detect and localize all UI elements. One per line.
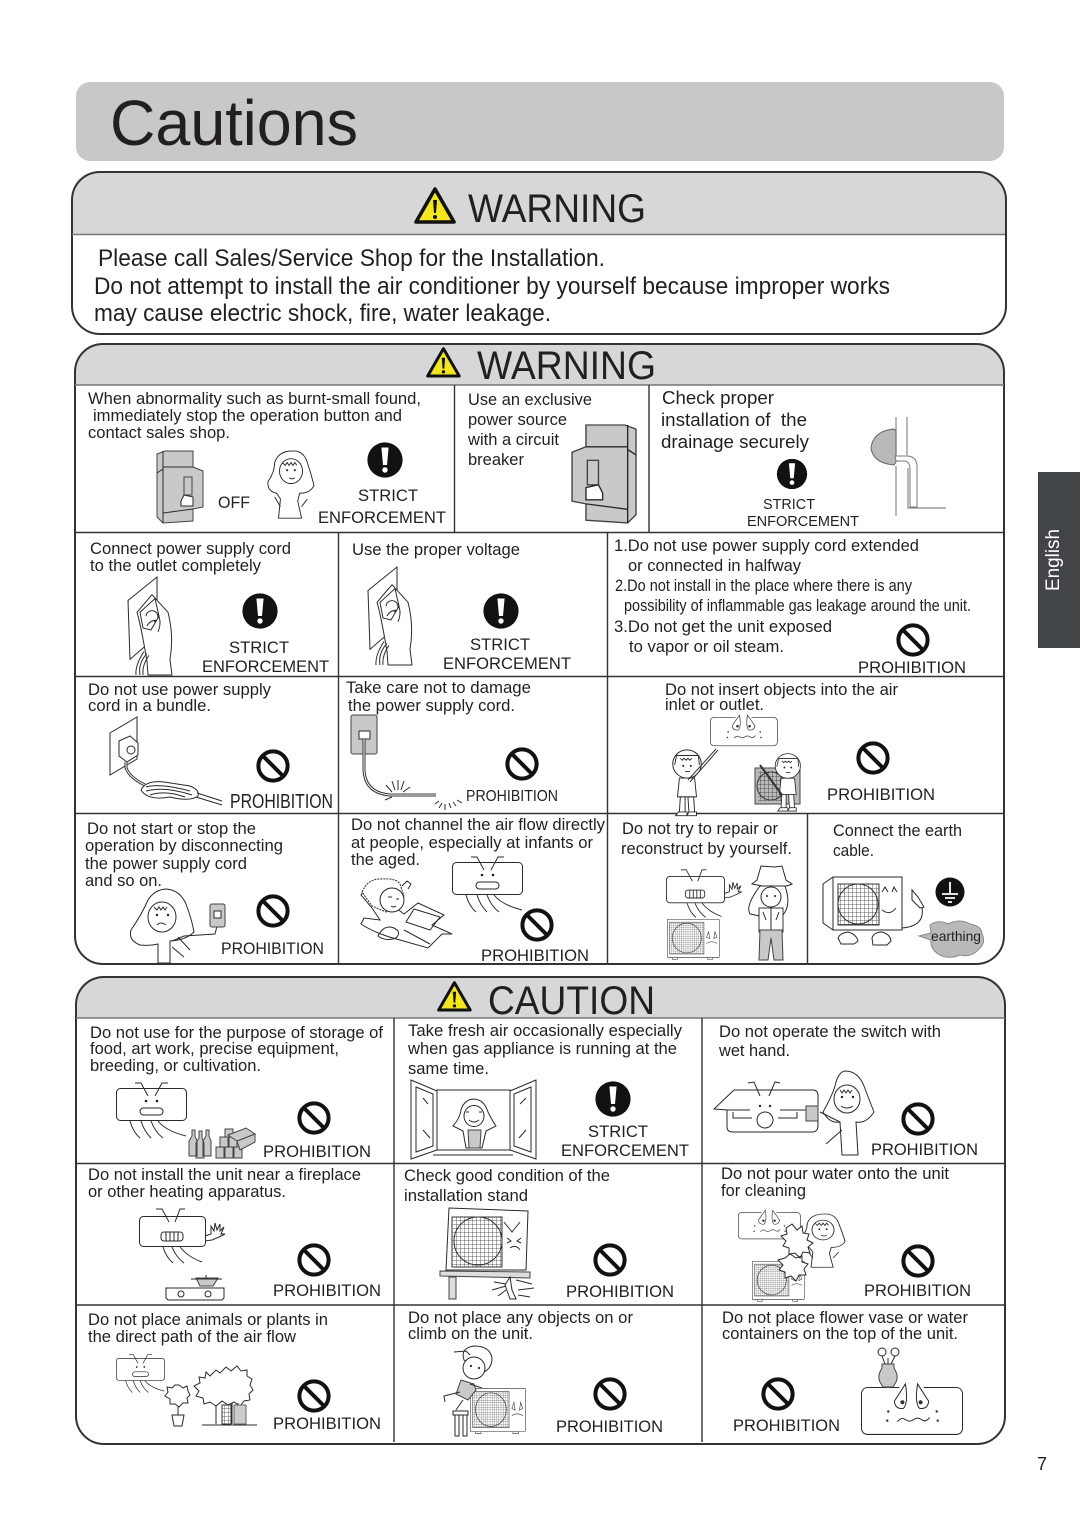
text: flower vase: containers on the top of the unit. (722, 1325, 958, 1343)
text: numbered rules: possibility of inflammable gas leakage around the unit. (624, 597, 971, 615)
illustration: indoor unit (116, 1083, 186, 1138)
cell: disconnecting (85, 820, 324, 963)
cell: bundle (88, 681, 333, 813)
illustration: open window with girl (411, 1080, 536, 1159)
icon: prohibition (763, 1379, 793, 1409)
text: outlet: to the outlet completely (90, 557, 262, 575)
cell: flower vase (722, 1309, 968, 1435)
illustration: outdoor unit on broken stand (440, 1208, 534, 1299)
illustration: outdoor unit and boy (755, 754, 800, 811)
illustration: girl spraying water (778, 1214, 845, 1281)
text: damaged cord: the power supply cord. (348, 697, 515, 715)
text: abnormality: When abnormality such as burnt-small found, (88, 390, 421, 408)
icon: prohibition (903, 1246, 933, 1276)
text: bundle: cord in a bundle. (88, 697, 211, 715)
text: wet hand: Do not operate the switch with (719, 1023, 941, 1041)
illustration: indoor unit (116, 1355, 165, 1392)
icon: prohibition (858, 743, 888, 773)
cell: cord and gas rules (614, 537, 971, 677)
text: bundle: Do not use power supply (88, 681, 272, 699)
text: numbered rules: 2.Do not install in the place where there is any (615, 577, 913, 595)
cell: fireplace (88, 1166, 381, 1300)
cell: animals and plants (88, 1311, 381, 1433)
text: circuit breaker: breaker (468, 451, 524, 469)
text: installation notice: may cause electric shock, fire, water leakage. (94, 300, 551, 327)
label: strict enforcement: STRICT (470, 636, 530, 654)
text: fireplace: Do not install the unit near a fireplace (88, 1166, 361, 1184)
icon: prohibition (258, 751, 288, 781)
cell: repair (621, 820, 792, 960)
icon: earth ground (936, 878, 964, 906)
icon: prohibition (258, 896, 288, 926)
label: prohibition: PROHIBITION (273, 1282, 381, 1300)
illustration: indoor unit (738, 1210, 800, 1239)
illustration: indoor unit opened (714, 1082, 818, 1132)
cell: drainage (661, 387, 946, 530)
illustration: outdoor unit with cable (823, 877, 924, 945)
text: air flow at people: the aged. (351, 851, 420, 869)
illustration: indoor unit (710, 715, 777, 746)
text: abnormality: immediately stop the operation button and (93, 407, 402, 425)
cell: abnormality (88, 390, 446, 527)
text: installation notice: Do not attempt to install the air conditioner by yourself because improper works (94, 273, 890, 300)
illustration: boy with stick (673, 749, 718, 816)
text: air flow at people (351, 816, 606, 869)
text: wet hand (718, 1023, 941, 1060)
label: strict enforcement: ENFORCEMENT (747, 514, 859, 530)
illustration: repair worker (749, 866, 792, 960)
label: OFF: OFF (218, 494, 250, 512)
text: repair: Do not try to repair or (622, 820, 778, 838)
text: abnormality (88, 390, 421, 442)
text: stand: installation stand (404, 1187, 528, 1205)
cell: fresh air (407, 1022, 689, 1160)
heading: WARNING: WARNING (477, 344, 656, 388)
page number: 7 (1037, 1454, 1047, 1474)
label: strict enforcement: ENFORCEMENT (561, 1142, 689, 1160)
label: prohibition: PROHIBITION (273, 1415, 381, 1433)
cell: voltage (352, 541, 571, 673)
label: strict enforcement (443, 636, 571, 673)
label: strict enforcement (202, 639, 329, 676)
text: animals and plants: the direct path of the air flow (88, 1328, 296, 1346)
text: circuit breaker (467, 391, 592, 469)
title banner (76, 82, 1004, 161)
text: numbered rules: 3.Do not get the unit exposed (614, 618, 832, 636)
text: numbered rules: 1.Do not use power supply cord extended (614, 537, 919, 555)
icon: breaker (572, 425, 636, 523)
cell: earth cable (823, 822, 984, 957)
label: prohibition: PROHIBITION (864, 1282, 971, 1300)
text: drainage: drainage securely (661, 431, 810, 452)
icon: prohibition (299, 1245, 329, 1275)
label: prohibition: PROHIBITION (871, 1141, 978, 1159)
text: circuit breaker: Use an exclusive (468, 391, 592, 409)
icon: prohibition (507, 749, 537, 779)
label: strict enforcement: STRICT (358, 487, 418, 505)
text: disconnecting: operation by disconnecting (85, 837, 283, 855)
cell: wet hand (714, 1023, 978, 1159)
label: prohibition: PROHIBITION (481, 947, 589, 965)
icon: warning triangle (439, 983, 470, 1010)
cell: stand (404, 1167, 674, 1301)
illustration: baby in rocking crib (361, 879, 452, 948)
text: storage: Do not use for the purpose of storage of (90, 1024, 383, 1042)
illustration: bottles and cans (189, 1128, 255, 1158)
heading: Cautions: Cautions (110, 87, 358, 159)
text: fireplace (88, 1166, 361, 1201)
text: stand (404, 1167, 610, 1205)
text: installation notice (94, 245, 890, 327)
icon: prohibition (898, 625, 928, 655)
text: climbing: climb on the unit. (408, 1325, 533, 1343)
label: prohibition: PROHIBITION (230, 791, 333, 813)
text: earth cable: cable. (833, 842, 874, 860)
label: strict enforcement (318, 487, 446, 527)
illustration: trees and unit (194, 1366, 257, 1425)
text: insert objects (665, 681, 898, 714)
text: earth cable: Connect the earth (833, 822, 962, 840)
text: pour water (721, 1165, 949, 1200)
text: animals and plants (88, 1311, 328, 1346)
text: storage: food, art work, precise equipment, (90, 1040, 339, 1058)
icon: prohibition (903, 1104, 933, 1134)
icon: warning triangle (428, 349, 459, 376)
text: numbered rules (614, 537, 971, 656)
illustration: girl at switch (820, 1071, 874, 1155)
text: stand: Check good condition of the (404, 1167, 610, 1185)
cell: storage (90, 1024, 383, 1161)
icon: strict enforcement (777, 459, 807, 489)
illustration: damaged cord (351, 715, 462, 810)
label: prohibition: PROHIBITION (263, 1143, 371, 1161)
text: insert objects: Do not insert objects into the air (665, 681, 898, 699)
heading: CAUTION: CAUTION (488, 979, 655, 1023)
heading: WARNING: WARNING (468, 187, 646, 231)
icon: girl phoning (268, 451, 314, 518)
illustration: outdoor unit (752, 1261, 804, 1301)
icon: prohibition (595, 1379, 625, 1409)
icon: hand holding plug (368, 567, 412, 665)
label: prohibition: PROHIBITION (221, 940, 324, 958)
cell: outlet (90, 540, 329, 676)
icon: prohibition (299, 1381, 329, 1411)
label: strict enforcement: ENFORCEMENT (202, 658, 329, 676)
illustration: indoor unit (862, 1384, 963, 1434)
text: circuit breaker: power source (468, 411, 567, 429)
text: numbered rules: or connected in halfway (628, 557, 802, 575)
text: animals and plants: Do not place animals or plants in (88, 1311, 328, 1329)
text: damaged cord (346, 679, 531, 715)
icon: strict enforcement (595, 1081, 631, 1117)
label: strict enforcement: STRICT (763, 497, 815, 513)
text: disconnecting: the power supply cord (85, 855, 247, 873)
illustration: gas stove (166, 1275, 224, 1300)
text: flower vase: Do not place flower vase or water (722, 1309, 968, 1327)
text: climbing: Do not place any objects on or (408, 1309, 634, 1327)
illustration: boy climbing on outdoor unit (444, 1346, 525, 1436)
text: fresh air: when gas appliance is running at the (407, 1040, 677, 1058)
icon: strict enforcement (483, 593, 519, 629)
cell: damaged cord (346, 679, 558, 810)
label: prohibition: PROHIBITION (858, 659, 966, 677)
text: disconnecting: Do not start or stop the (87, 820, 256, 838)
label: prohibition: PROHIBITION (556, 1418, 663, 1436)
text: repair (621, 820, 792, 858)
text: circuit breaker: with a circuit (467, 431, 559, 449)
icon: prohibition (299, 1103, 329, 1133)
text: disconnecting: and so on. (85, 872, 162, 890)
illustration: indoor unit (140, 1209, 225, 1263)
text: storage (90, 1024, 383, 1075)
icon: hand holding plug (128, 577, 172, 675)
text: numbered rules: to vapor or oil steam. (629, 638, 784, 656)
text: disconnecting (85, 820, 283, 890)
text: bundle (88, 681, 272, 715)
label: prohibition: PROHIBITION (827, 786, 935, 804)
cell: insert objects (665, 681, 935, 816)
icon: warning triangle (416, 189, 454, 222)
illustration: indoor unit (452, 857, 522, 912)
label: strict enforcement (561, 1123, 689, 1160)
label: strict enforcement: ENFORCEMENT (443, 655, 571, 673)
illustration: flower vase (878, 1348, 899, 1387)
icon: breaker off (157, 451, 203, 523)
text: earth cable (833, 822, 962, 860)
text: air flow at people: Do not channel the air flow directly (351, 816, 606, 834)
panel: installation warning (72, 172, 1006, 334)
label: prohibition: PROHIBITION (733, 1417, 840, 1435)
text: fresh air: Take fresh air occasionally especially (408, 1022, 683, 1040)
text: fireplace: or other heating apparatus. (88, 1183, 286, 1201)
panel: warning list (75, 344, 1004, 965)
illustration: potted plant (165, 1385, 190, 1426)
icon: prohibition (522, 910, 552, 940)
label: strict enforcement: STRICT (588, 1123, 648, 1141)
label: strict enforcement: ENFORCEMENT (318, 509, 446, 527)
illustration: bundled cord (110, 717, 222, 805)
text: drainage (661, 387, 810, 452)
text: climbing (408, 1309, 634, 1343)
text: insert objects: inlet or outlet. (665, 696, 764, 714)
label: prohibition: PROHIBITION (566, 1283, 674, 1301)
side tab: English (1038, 472, 1080, 648)
text: pour water: for cleaning (721, 1182, 806, 1200)
text: storage: breeding, or cultivation. (90, 1057, 261, 1075)
text: wet hand: wet hand. (718, 1042, 790, 1060)
callout: earthing (919, 921, 984, 957)
text: pour water: Do not pour water onto the unit (721, 1165, 949, 1183)
side tab: English: English (1043, 529, 1064, 591)
text: voltage: Use the proper voltage (352, 541, 520, 559)
label: strict enforcement: STRICT (229, 639, 289, 657)
text: fresh air: same time. (408, 1060, 489, 1078)
label: prohibition: PROHIBITION (466, 788, 558, 805)
text: drainage: installation of the (661, 409, 807, 430)
illustration: outdoor unit (667, 919, 719, 959)
cell: pour water (721, 1165, 971, 1301)
text: abnormality: contact sales shop. (88, 424, 230, 442)
icon: strict enforcement (367, 442, 403, 478)
text: outlet (90, 540, 291, 575)
text: installation notice: Please call Sales/Service Shop for the Installation. (98, 245, 605, 272)
text: repair: reconstruct by yourself. (621, 840, 792, 858)
label: strict enforcement (747, 497, 859, 530)
icon: prohibition (595, 1245, 625, 1275)
callout: earthing: earthing (931, 928, 981, 944)
text: outlet: Connect power supply cord (90, 540, 291, 558)
illustration: indoor unit (666, 870, 742, 917)
cell: climbing (408, 1309, 663, 1436)
illustration: girl pulling plug (130, 889, 225, 963)
cell: circuit breaker (467, 391, 636, 523)
text: damaged cord: Take care not to damage (346, 679, 531, 697)
text: flower vase (722, 1309, 968, 1343)
icon: strict enforcement (242, 593, 278, 629)
cell: air flow at people (351, 816, 606, 965)
text: drainage: Check proper (662, 387, 774, 408)
text: fresh air (407, 1022, 683, 1078)
panel: caution list (76, 977, 1005, 1444)
illustration: indoor unit and drain pipe (871, 417, 946, 516)
text: air flow at people: at people, especially at infants or (351, 834, 593, 852)
